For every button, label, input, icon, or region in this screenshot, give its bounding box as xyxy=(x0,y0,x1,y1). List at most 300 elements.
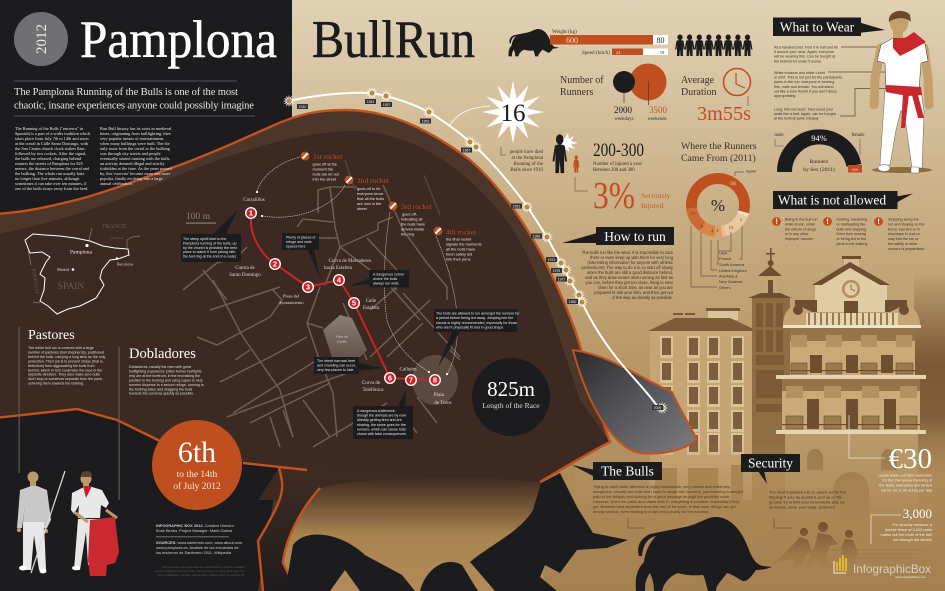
map place labels: Cuesta de xyxy=(235,266,256,271)
how to run: prepared to risk your skin, and then get out xyxy=(594,290,674,295)
wear notes: at the festival quite cheaply xyxy=(774,117,819,121)
city dots xyxy=(72,244,118,271)
body inner shade xyxy=(0,131,610,500)
rule 2: or maltreating the xyxy=(836,222,865,226)
disclaimer: All information and materials are obtained from a publicly available xyxy=(163,565,245,569)
bull body xyxy=(0,110,610,591)
big bull bottom xyxy=(636,517,772,591)
spain map xyxy=(25,224,140,314)
rule 2: Holding, harassing xyxy=(836,218,867,222)
pastores: Pastores xyxy=(28,328,75,343)
pastores: number of pastores (bull shepherds), positioned xyxy=(28,350,104,354)
balcony price: €30 xyxy=(888,443,932,475)
orange outlines xyxy=(0,110,610,591)
deaths star xyxy=(450,81,544,143)
number of runners heading: Runners xyxy=(560,87,593,98)
credits: Boris Benko, Project Manager: Mario Galera xyxy=(156,528,233,533)
route markers: 7 xyxy=(409,376,413,385)
how to run: (interesting information for anyone with athletic xyxy=(587,260,673,265)
intro column 1: Spanish) is a part of a wider tradition which xyxy=(15,131,91,136)
callout: steep start: by the church is probably the best xyxy=(183,246,237,250)
callout: dangerous corner: always run wide xyxy=(373,282,399,286)
historic death timeline: 2009 xyxy=(654,406,661,410)
sex gauge: 6% xyxy=(852,168,858,172)
sex gauge xyxy=(774,133,865,173)
how to run: them or even keep up with them for very long xyxy=(590,255,674,260)
intro column 1: takes place from July 7th to 14th and starts xyxy=(15,136,89,141)
bulls bracket xyxy=(628,518,645,528)
length circle xyxy=(472,358,550,436)
historic death timeline: 1910 xyxy=(299,105,306,109)
the bulls: deadly serious, even leading to a bad end (usually for the runners) xyxy=(593,509,709,514)
callout: steep start: Pamplona running of the bulls, up xyxy=(183,241,237,245)
map labels: FRANCE xyxy=(102,224,126,230)
callout: bottleneck xyxy=(353,390,413,439)
rule 3: fence, barriers or in xyxy=(888,227,920,231)
figure: doblador xyxy=(71,471,119,576)
wear notes: Red handkerchief. Fold it in half and tie xyxy=(774,46,838,50)
balcony price: out for 20 or 30 euros per day xyxy=(881,488,932,492)
run route xyxy=(251,213,435,380)
fence figure: 3,000 xyxy=(903,506,932,521)
how to run: and as they draw nearer start running as fast as xyxy=(585,275,673,280)
rocket 2: everyone know xyxy=(357,191,383,196)
rule top xyxy=(14,80,237,82)
figure: runner outfit xyxy=(872,10,932,173)
donut legend: New Zealand xyxy=(719,279,742,284)
donut legend: South America xyxy=(719,262,745,267)
dobladores: Dobladores, usually the men with great xyxy=(129,365,191,369)
intro column 2: was through city streets and people xyxy=(100,151,161,156)
title: BullRun: BullRun xyxy=(312,11,475,69)
icon row: runners xyxy=(675,34,752,56)
map place labels: Santo Domingo xyxy=(229,273,261,278)
fence figure xyxy=(871,506,933,544)
pastores: defectors) from aggravating the bulls from xyxy=(28,364,95,368)
rocket 3: 3rd rocket xyxy=(401,202,433,211)
historic death timeline: 1953 xyxy=(422,119,429,123)
buildings xyxy=(648,248,926,500)
deaths star: 16 xyxy=(500,100,526,127)
rocket 3: indicating all xyxy=(401,216,423,222)
rocket 3 xyxy=(389,202,433,236)
disclaimer xyxy=(155,565,246,577)
wear notes: White trousers and white t-shirt xyxy=(774,71,825,75)
title: Pamplona: Pamplona xyxy=(80,11,277,69)
date circle: of July 2012 xyxy=(173,481,221,492)
balcony price: Locals lease out their balconies xyxy=(878,472,932,478)
pastores: don't stop or somehow separate from the pack, xyxy=(28,377,103,381)
date circle: to the 14th xyxy=(177,470,218,480)
callout: narrow street xyxy=(314,357,383,374)
callout: steep start xyxy=(181,210,241,262)
belly between legs xyxy=(258,468,540,591)
rocket 1: moment the xyxy=(312,166,333,172)
sex gauge: female xyxy=(851,133,865,138)
200-300: Number of injured a year: xyxy=(593,162,643,167)
intro column 1: meters, the distance between the corral and xyxy=(15,166,90,172)
the bulls: path to the bullpen and looking for a quick passage through the provided route. xyxy=(593,494,730,499)
map place labels: Corralillos xyxy=(243,198,265,203)
deaths text: at the Pamplona xyxy=(511,156,544,161)
how to run: when the bulls are still a good distance behind, xyxy=(587,270,673,275)
callout: bottleneck: already getting tired and are xyxy=(357,418,402,422)
duration heading: Average xyxy=(681,75,715,86)
callout: bulls slowed: The bulls are allowed to run amongst the runners for xyxy=(436,312,520,316)
body fill xyxy=(0,110,610,591)
historic death timeline: 1977 xyxy=(558,277,565,281)
deaths text: Running of the xyxy=(514,162,543,167)
how to run: you can, before they get too close, hang in near xyxy=(586,280,674,285)
injured bracket xyxy=(575,177,588,191)
runners silhouette xyxy=(770,522,858,575)
where heading: Came From (2011) xyxy=(681,153,756,164)
rule 3: the safety of other xyxy=(888,242,918,246)
map labels: Barcelona xyxy=(117,262,133,266)
credits: www.pamplona.es, Analisis de las encuestas de xyxy=(156,545,239,550)
callout: steep start: the bull ring at the end of a route) xyxy=(183,255,236,259)
speed bar xyxy=(582,48,668,56)
duration heading: Duration xyxy=(681,87,717,98)
security xyxy=(741,454,847,510)
callout: dangerous corner: where the bulls xyxy=(373,277,397,281)
rocket 2: goes off to let xyxy=(357,186,381,191)
what to wear: What to Wear xyxy=(780,20,855,34)
fence figure: run through the streets xyxy=(893,537,932,542)
historic death timeline: 1974 xyxy=(548,258,555,262)
donut legend: Spain xyxy=(746,168,756,174)
rocket 4 xyxy=(434,227,482,262)
map labels: ANDORRA xyxy=(110,236,125,240)
route markers: 3 xyxy=(306,283,310,292)
200-300: 200-300 xyxy=(593,140,644,161)
credits: SOURCES: www.sanfermin.com, www.about.com, xyxy=(156,540,243,545)
100 m scale: 100 m xyxy=(186,212,211,222)
map labels: PORTUGAL xyxy=(30,268,39,295)
rocket 3: arrived inside xyxy=(401,226,424,232)
3 percent xyxy=(593,175,671,217)
donut labels: 15 xyxy=(729,225,734,230)
weight bar: 80 xyxy=(656,36,664,45)
donut legend: United Kingdom xyxy=(719,268,747,273)
horn xyxy=(573,350,697,454)
rocket 1: into the street xyxy=(312,176,337,182)
length circle: 825m xyxy=(487,377,535,401)
speed bar: 24 xyxy=(616,50,621,55)
rocket 1 xyxy=(301,152,343,182)
wear notes: this, male and female. You will stand xyxy=(774,85,833,89)
dobladores xyxy=(129,346,204,396)
rule 3 xyxy=(874,217,924,251)
sex gauge: Runners xyxy=(810,159,828,165)
rocket 3: the bulls have xyxy=(401,222,425,226)
connector tips xyxy=(256,191,448,375)
callout: narrow street: very few places to hide xyxy=(317,368,354,372)
the bulls xyxy=(572,462,744,514)
map labels: Madrid xyxy=(57,267,69,272)
rule 1: while drunk, under xyxy=(785,222,816,226)
map labels: Pamplona xyxy=(70,250,93,256)
wear notes: will be wearing this. Can be bought at xyxy=(774,55,835,59)
route markers: 5 xyxy=(352,299,356,308)
historic death timeline: 1969 xyxy=(533,234,540,238)
how to run: of the way as cleanly as possible. xyxy=(612,295,673,300)
route markers xyxy=(246,208,440,385)
map place labels: Plaza del xyxy=(336,334,348,338)
rocket 2: 2nd rocket xyxy=(357,176,390,185)
building with roof xyxy=(648,308,758,500)
the bulls: Trying to catch bulls' attention is highly inadvisable, very unwise and extremely xyxy=(593,484,730,489)
wear notes: appropriately. xyxy=(774,94,796,98)
black panel left xyxy=(0,0,292,230)
rule 3: runners is jeopardised xyxy=(888,247,924,251)
callout: refuge: spaces here xyxy=(286,245,306,249)
donut labels: 2 xyxy=(716,228,719,233)
route dashed connectors xyxy=(257,157,457,375)
security: The most important rule is: watch out for the xyxy=(769,490,847,494)
callout: bottleneck: though the animals are by now xyxy=(357,414,406,418)
balcony price: the Bulls. Balconies are rented xyxy=(879,482,932,488)
rocket 4: been safely led xyxy=(446,252,472,256)
sex gauge: by Sex (2011) xyxy=(803,166,835,173)
rocket 4: into their pens xyxy=(446,256,470,262)
bull rear right of head xyxy=(470,473,628,591)
dobladores: runners disperse to a secure refuge, running to xyxy=(129,383,204,387)
intro column 1: the bullring. The whole run usually lasts xyxy=(15,171,85,176)
wear notes: it around your neck. Again, everyone xyxy=(774,50,834,54)
icon: clock xyxy=(724,68,750,96)
credits: los encierros de Sanfermín 2011, Wikipedia xyxy=(156,550,232,555)
runners venn: weekends xyxy=(648,117,667,122)
plaza del castillo xyxy=(323,315,367,366)
historic death timeline: 1961 xyxy=(513,204,520,208)
callout: refuge xyxy=(282,233,320,278)
what is not allowed xyxy=(773,191,913,209)
rocket 2: street xyxy=(357,206,368,211)
balcony price xyxy=(849,415,933,492)
rule 3: run and staying on the xyxy=(888,222,924,226)
security: tripping! If you, by accident, end up on the xyxy=(769,494,843,500)
runner one xyxy=(770,528,812,575)
dobladores: towards the corral as quickly as possible. xyxy=(129,392,194,396)
callout: bottleneck: chaos with fatal consequences xyxy=(357,432,406,436)
disclaimer: sources believed to be accurate, and are subject to copyrights owned by xyxy=(155,569,246,573)
how to run: How to run xyxy=(604,229,666,244)
intro column 1: runners the streets of Pamplona for 825 xyxy=(15,161,83,166)
dobladores: Dobladores xyxy=(129,346,196,362)
intro column 1: The Running of the Bulls ("encierro" in xyxy=(15,126,84,131)
rule 2: them from moving xyxy=(836,232,866,236)
donut legend: USA xyxy=(719,250,727,256)
rocket 4: signals the moments xyxy=(446,242,482,246)
3 percent: Seriously xyxy=(641,191,671,200)
date circle xyxy=(152,420,242,510)
faded building left xyxy=(575,436,650,526)
tower xyxy=(748,248,792,470)
the bulls: get distracted and separated from the rest of the pack. In that case, things can get xyxy=(593,504,737,509)
year badge xyxy=(14,12,68,66)
dobladores: bullfighting experience (often former bullfights xyxy=(129,369,202,373)
fence figure: marks out the route of the bull xyxy=(881,532,932,537)
donut labels: 2 xyxy=(740,217,742,222)
the bulls: dangerous. Usually the bulls don't want to tangle with humans, just following a straight xyxy=(593,489,744,494)
intro column 1: one of the bulls strays away from the herd. xyxy=(15,186,88,191)
wear notes: the festival for under 5 euros. xyxy=(774,59,822,63)
intro column 1: the San Cernin church clock strikes 8am, xyxy=(15,146,86,152)
rocket 4: all the bulls have xyxy=(446,246,475,252)
100 m scale xyxy=(186,212,216,224)
lower window xyxy=(283,478,545,591)
3 percent: Injured xyxy=(641,201,664,210)
wear notes: out like a sore thumb if you don't dress xyxy=(774,89,837,93)
the bulls: The Bulls xyxy=(601,464,654,478)
wear notes xyxy=(774,46,842,121)
donut leaders xyxy=(691,172,744,287)
plaza de toros xyxy=(412,355,458,405)
runners venn: weekdays xyxy=(615,117,634,122)
historic death timeline: 1924 xyxy=(367,100,374,104)
callout: dangerous corner: A dangerous corner xyxy=(373,272,405,276)
wear notes: waist like a belt. Again, can be bought xyxy=(774,112,836,116)
balcony price: for the Pamplona Running of xyxy=(882,478,933,482)
runners venn: 3500 xyxy=(649,105,668,115)
what to wear xyxy=(773,18,885,36)
historic death timeline: 1975 xyxy=(553,269,560,273)
route markers: 1 xyxy=(249,209,253,218)
where heading: Where the Runners xyxy=(681,141,757,152)
rocket 2: that all the bulls xyxy=(357,196,384,201)
logo xyxy=(834,555,931,579)
rule 3: Stopping along the xyxy=(888,218,919,222)
donut labels: 56 xyxy=(730,181,736,187)
rule 1: improper manner xyxy=(785,237,814,241)
dobladores: the bullring sides and dragging the bulls xyxy=(129,387,193,391)
rocket 2: are now in the xyxy=(357,201,381,206)
how to run: The bulls run like the wind. It is impossible to race xyxy=(582,250,674,255)
donut legend xyxy=(719,168,756,290)
pastores: behind, which in turn could take the race in the xyxy=(28,368,102,372)
portugal border xyxy=(28,228,140,303)
historic death timeline: 1980 xyxy=(569,300,576,304)
security: ground, try to limit your movements and, by xyxy=(769,500,845,504)
intro column 1: the bulls are released, charging behind xyxy=(15,156,82,162)
historic death timeline: 1927 xyxy=(383,103,390,107)
intro column 1: no longer than five minutes, although xyxy=(15,176,80,182)
map place labels: Estafeta xyxy=(363,306,380,311)
pastores: behind the bulls, carrying a long stick as the only xyxy=(28,355,106,359)
donut labels: 4 xyxy=(711,228,714,233)
map place labels: hacia Estafeta xyxy=(324,266,353,271)
rule 1: Being in the bull run xyxy=(785,218,818,222)
map place labels: Curva de Mercaderes xyxy=(329,259,371,264)
subtitle: The Pamplona Running of the Bulls is one of the most xyxy=(14,87,238,98)
security bracket xyxy=(774,518,792,528)
how to run: them for a short time, as near as you are xyxy=(598,285,674,290)
3 percent: 3% xyxy=(593,175,635,217)
callout: narrow street: The street narrows here xyxy=(317,359,355,363)
rule 3: doorways in such a xyxy=(888,232,921,236)
what is not allowed: What is not allowed xyxy=(778,192,886,208)
rule 2: bulls and stopping xyxy=(836,227,866,231)
wear notes: Long, thin red scarf. Tied round your xyxy=(774,108,834,112)
map place labels: Plaza xyxy=(434,393,445,398)
date circle: 6th xyxy=(178,436,216,469)
donut labels: % xyxy=(711,196,725,215)
rocket 4: 4th rocket xyxy=(446,228,477,236)
intro column 2: eventually started running with the bulls, xyxy=(100,156,170,162)
rocket 4: the final rocket xyxy=(446,236,472,242)
callout: refuge: refuge and wide xyxy=(286,240,312,244)
logo: InfographicBox xyxy=(853,562,931,576)
map place labels: Telefónica xyxy=(362,388,384,393)
credits: INFOGRAPHIC BOX 2012. Creative Director: xyxy=(156,523,235,528)
black bulls lower xyxy=(285,473,628,591)
intro column 1: at the corral in Calle Santo Domingo, with xyxy=(15,141,89,147)
town hall xyxy=(776,256,926,486)
pastores: protection. Their job is to prevent strays (that is, xyxy=(28,359,104,363)
deaths text: Bulls since 1910 xyxy=(510,168,544,173)
duration value: 3m55s xyxy=(697,103,751,125)
rule 2: or being led to the xyxy=(836,237,866,241)
weight bar: Weight (kg) xyxy=(552,28,577,35)
route markers: 4 xyxy=(337,276,342,285)
map place labels: Callejón xyxy=(400,368,417,372)
pastores: opposite direction. They also make sure bulls xyxy=(28,373,100,377)
intro column 2: very popular means of entertainment, xyxy=(100,136,164,142)
black panel bottom left xyxy=(0,400,300,591)
rocket 3: the ring xyxy=(401,232,414,236)
callout: bottleneck: runners, which can cause total xyxy=(357,427,406,431)
callout: narrow street: and crowding can occur, xyxy=(317,364,356,368)
pastores: The entire bull run is covered with a large xyxy=(28,346,94,350)
callout: bulls slowed xyxy=(434,309,520,367)
wear notes: or shirt. This is not just for the participants xyxy=(774,76,842,80)
intro column 2: annual celebration. xyxy=(100,181,133,186)
route markers: 8 xyxy=(433,376,437,385)
pastores divider xyxy=(18,327,20,473)
how to run: pretensions). The way to do it is, to start off slowly xyxy=(582,265,674,270)
speed bar: 19 xyxy=(660,50,665,55)
rule 1: or in any other xyxy=(785,232,809,236)
dobladores: position in the bullring and using capes to help xyxy=(129,378,203,382)
wear notes: pants in the run, everyone is wearing xyxy=(774,80,834,84)
donut labels: 8 xyxy=(701,224,704,229)
map place labels xyxy=(229,198,452,406)
fence figure: double fence of 3,000 parts xyxy=(885,527,932,532)
icon: bull xyxy=(509,29,559,56)
dust lines xyxy=(830,550,925,558)
map place labels: Plaza del xyxy=(283,294,300,298)
subtitle: chaotic, insane experiences anyone could possibly imagine xyxy=(14,100,254,112)
rocket 1: bulls are let out xyxy=(312,172,340,176)
200-300 xyxy=(593,140,644,173)
callout: steep start: The steep uphill start to the xyxy=(183,237,226,241)
route markers: 6 xyxy=(388,374,392,383)
donut legend: France xyxy=(719,256,731,261)
intro column 2: when many bullrings were built. The the xyxy=(100,141,170,146)
sex gauge: 94% xyxy=(811,133,827,143)
credits xyxy=(156,523,243,555)
map place labels: Ayuntamiento xyxy=(278,300,304,305)
runners venn xyxy=(613,64,668,122)
logo: www.infographicbox.com xyxy=(895,575,927,579)
map place labels: Calle xyxy=(366,299,377,304)
callout: bottleneck: A dangerous bottleneck: xyxy=(357,409,396,413)
rocket 1: goes off at the xyxy=(312,162,337,166)
speed bar: Speed (km/h) xyxy=(582,49,610,56)
donut labels xyxy=(691,181,742,233)
figure: pastor xyxy=(17,471,65,574)
